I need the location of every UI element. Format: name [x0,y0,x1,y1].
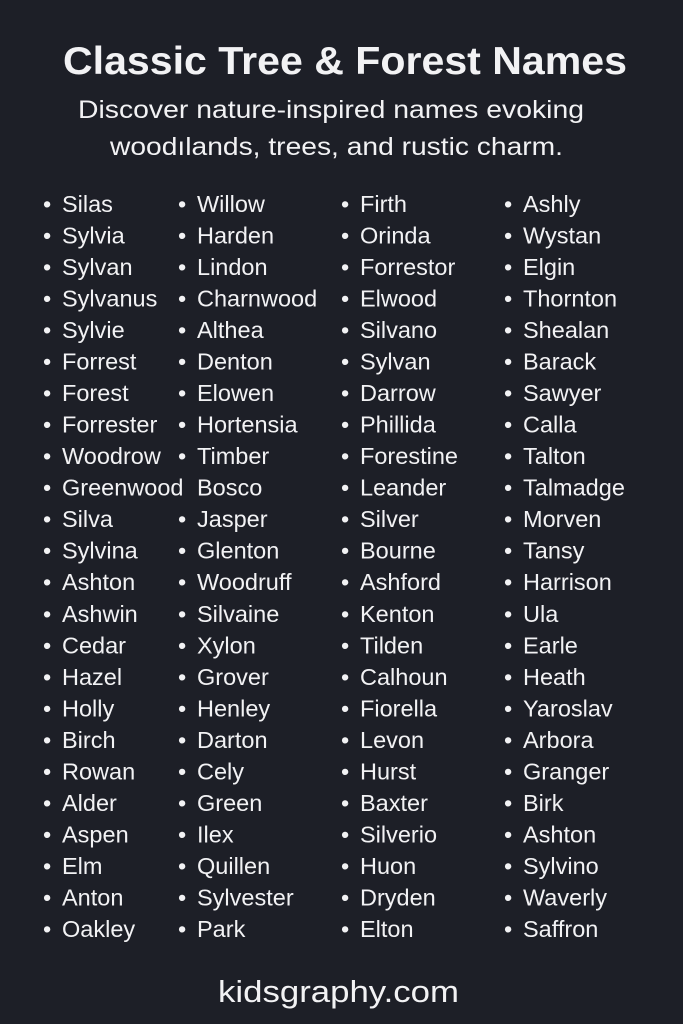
subtitle [78,96,584,161]
column 2 names: Elowen [197,380,274,406]
column 4 names: • [504,853,512,879]
column 2 names: Hortensia [197,412,299,438]
column 1 names: Sylvanus [62,286,157,312]
column 4 names: Barack [523,349,596,375]
column 1 names: • [43,664,51,690]
column 1 names: • [43,601,51,627]
column 3 names: • [341,884,349,910]
column 4 names: • [504,538,512,564]
column 4 names: Wystan [523,222,601,248]
column 2 names: • [178,664,186,690]
column 2 names: • [178,727,186,753]
column 3 names: • [341,758,349,784]
column 1 names: • [43,349,51,375]
column 2 names: Althea [197,317,265,343]
column 2 names: Lindon [197,254,268,280]
column 3 names: • [341,790,349,816]
column 2 names: Xylon [197,632,256,658]
column 4 names: Morven [523,506,601,532]
column 1 names: Forest [62,380,129,406]
column 2 names: • [178,506,186,532]
column 3 names: • [341,349,349,375]
column 2 names: • [178,286,186,312]
column 4 names: • [504,412,512,438]
column 2 names: • [178,853,186,879]
column 2 names: Darton [197,727,268,753]
column 3 names: Silvano [360,317,437,343]
column 1 names: Forrest [62,349,137,375]
column 1 names: • [43,286,51,312]
column 2 names: • [178,790,186,816]
column 3 names: Silver [360,506,419,532]
column 1 names: Cedar [62,632,126,658]
column 1 names: • [43,727,51,753]
column 1 names: • [43,380,51,406]
column 3 names: • [341,632,349,658]
column 1 names: Alder [62,790,117,816]
column 3 names: Sylvan [360,349,431,375]
column 4 names: • [504,632,512,658]
column 3 names: • [341,317,349,343]
column 1 names: Anton [62,884,123,910]
column 1 names: Holly [62,695,114,721]
column 1 names: Sylvia [62,222,126,248]
column 4 names: Talton [523,443,586,469]
column 2 names: Charnwood [197,286,317,312]
column 2 names: • [178,254,186,280]
column 4 names: • [504,916,512,942]
column 3 names: • [341,412,349,438]
column 3 names: • [341,191,349,217]
column 4 names: Calla [523,412,577,438]
column 3 names: Elton [360,916,414,942]
column 4 names: • [504,884,512,910]
column 3 names: • [341,695,349,721]
column 1 names: • [43,412,51,438]
title: Classic Tree & Forest Names [63,40,627,83]
column 3 names: Leander [360,475,446,501]
column 2 names: Woodruff [197,569,292,595]
column 1 names: • [43,475,51,501]
column 4 names: Shealan [523,317,609,343]
column 2 names: • [178,632,186,658]
column 4 names: Yaroslav [523,695,613,721]
column 3 names: Forrestor [360,254,455,280]
column 2 names: Glenton [197,538,279,564]
column 2 names: Henley [197,695,270,721]
column 1 names: Hazel [62,664,122,690]
column 3 names: • [341,222,349,248]
column 4 names: Sylvino [523,853,599,879]
column 2 names: Ilex [197,821,234,847]
column 3 names: Darrow [360,380,437,406]
column 1 names: Sylvie [62,317,125,343]
column 2 names: Green [197,790,262,816]
column 4 names: Earle [523,632,578,658]
column 1 names: Forrester [62,412,157,438]
column 4 names: • [504,317,512,343]
subtitle: woodılands, trees, and rustic charm. [109,133,563,161]
column 4 names: • [504,475,512,501]
column 4 names: Saffron [523,916,598,942]
column 1 names: Sylvan [62,254,133,280]
column 2 names: • [178,569,186,595]
column 3 names: Tilden [360,632,423,658]
column 3 names: • [341,254,349,280]
column 4 names: Waverly [523,884,607,910]
column 3 names: • [341,727,349,753]
column 4 names: • [504,380,512,406]
column 1 names: • [43,632,51,658]
column 2 names: • [178,916,186,942]
column 4 names: • [504,727,512,753]
column 3 names: Calhoun [360,664,448,690]
column 1 names: • [43,695,51,721]
column 4 names: Granger [523,758,609,784]
column 4 names: • [504,695,512,721]
column 2 names: Jasper [197,506,268,532]
column 1 names: • [43,821,51,847]
column 2 names: • [178,601,186,627]
column 2 names: Park [197,916,246,942]
column 3 names: • [341,286,349,312]
column 1 names: • [43,853,51,879]
column 4 names: • [504,254,512,280]
column 1 names: Silas [62,191,113,217]
column 4 names: • [504,443,512,469]
column 1 names: • [43,916,51,942]
column 4 names: • [504,664,512,690]
column 4 names [504,191,625,942]
column 1 names: • [43,758,51,784]
column 2 names: • [178,443,186,469]
column 2 names: Harden [197,222,274,248]
column 3 names: Kenton [360,601,434,627]
column 3 names: • [341,601,349,627]
column 3 names: • [341,569,349,595]
column 3 names: Hurst [360,758,417,784]
column 3 names [341,191,458,942]
column 3 names: • [341,475,349,501]
column 3 names: • [341,853,349,879]
column 3 names: Dryden [360,884,436,910]
column 3 names: • [341,443,349,469]
column 4 names: Elgin [523,254,575,280]
column 2 names: • [178,884,186,910]
column 2 names: Willow [197,191,266,217]
column 1 names: Silva [62,506,114,532]
column 4 names: • [504,286,512,312]
column 1 names: Greenwood [62,475,184,501]
column 4 names: • [504,191,512,217]
column 2 names: Bosco [197,475,262,501]
column 4 names: • [504,349,512,375]
column 2 names: Denton [197,349,273,375]
column 4 names: • [504,569,512,595]
column 1 names: Elm [62,853,102,879]
column 2 names [178,191,317,942]
column 1 names: • [43,884,51,910]
column 2 names: • [178,349,186,375]
column 3 names: Levon [360,727,424,753]
column 1 names: • [43,538,51,564]
column 1 names: Birch [62,727,116,753]
column 3 names: Baxter [360,790,428,816]
column 1 names: Aspen [62,821,129,847]
column 1 names: Sylvina [62,538,139,564]
column 3 names: Fiorella [360,695,438,721]
column 3 names: • [341,916,349,942]
column 2 names: • [178,821,186,847]
column 2 names: • [178,758,186,784]
column 2 names: Grover [197,664,269,690]
column 4 names: Tansy [523,538,585,564]
column 2 names: • [178,412,186,438]
column 1 names: • [43,317,51,343]
column 3 names: Firth [360,191,407,217]
column 1 names: • [43,506,51,532]
column 4 names: Sawyer [523,380,602,406]
column 1 names: • [43,569,51,595]
column 3 names: • [341,506,349,532]
footer website: kidsgraphy.com [218,974,459,1009]
column 1 names: Oakley [62,916,135,942]
column 4 names: Ashly [523,191,581,217]
column 1 names: • [43,790,51,816]
column 2 names: • [178,317,186,343]
column 2 names: Cely [197,758,244,784]
column 2 names: • [178,538,186,564]
column 3 names: Forestine [360,443,458,469]
column 1 names: Ashton [62,569,135,595]
column 4 names: Thornton [523,286,617,312]
column 2 names: Timber [197,443,269,469]
column 4 names: Arbora [523,727,594,753]
column 1 names: • [43,191,51,217]
column 4 names: Ula [523,601,559,627]
column 2 names: Sylvester [197,884,294,910]
column 1 names: • [43,254,51,280]
column 1 names: Rowan [62,758,135,784]
column 4 names: Ashton [523,821,596,847]
column 2 names: • [178,695,186,721]
column 1 names: Woodrow [62,443,162,469]
column 4 names: • [504,758,512,784]
column 3 names: • [341,380,349,406]
column 4 names: Birk [523,790,564,816]
column 1 names: Ashwin [62,601,138,627]
column 2 names: Quillen [197,853,270,879]
column 4 names: • [504,790,512,816]
column 4 names: Harrison [523,569,612,595]
column 2 names: • [178,222,186,248]
subtitle: Discover nature-inspired names evoking [78,96,584,124]
column 3 names: Orinda [360,222,431,248]
column 4 names: Heath [523,664,586,690]
column 2 names: • [178,380,186,406]
column 2 names: Silvaine [197,601,279,627]
column 4 names: • [504,506,512,532]
column 3 names: Phillida [360,412,437,438]
column 2 names: • [178,191,186,217]
column 4 names: • [504,601,512,627]
column 3 names: Huon [360,853,416,879]
column 3 names: • [341,664,349,690]
column 3 names: Elwood [360,286,437,312]
column 1 names: • [43,222,51,248]
column 3 names: Bourne [360,538,436,564]
column 4 names: • [504,222,512,248]
column 3 names: • [341,821,349,847]
column 1 names: • [43,443,51,469]
column 3 names: • [341,538,349,564]
column 3 names: Ashford [360,569,441,595]
column 3 names: Silverio [360,821,437,847]
column 4 names: Talmadge [523,475,625,501]
column 1 names [43,191,184,942]
column 4 names: • [504,821,512,847]
